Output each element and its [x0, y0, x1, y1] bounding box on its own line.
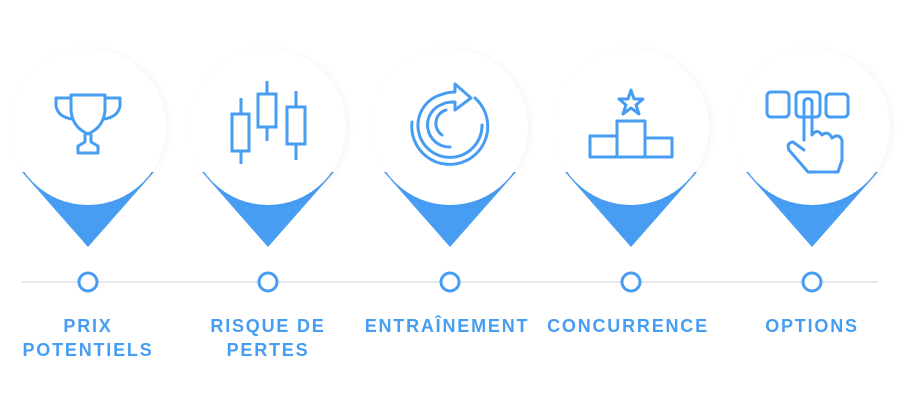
- icon: refresh: [412, 84, 488, 164]
- pin 2: [190, 49, 346, 247]
- label 1: POTENTIELS: [22, 340, 154, 360]
- label 2: PERTES: [227, 340, 309, 360]
- label 2: RISQUE DE: [210, 316, 326, 336]
- pin 5: [734, 49, 890, 247]
- icon: candles: [232, 81, 305, 164]
- timeline markers: [79, 273, 821, 291]
- icon: hand pressing: [767, 92, 848, 172]
- pin 4: [553, 49, 709, 247]
- label 1: PRIX: [63, 316, 113, 336]
- icon: trophy: [56, 95, 120, 153]
- label 3: ENTRAÎNEMENT: [365, 316, 529, 336]
- label 1: [22, 316, 154, 360]
- label 4: CONCURRENCE: [547, 316, 709, 336]
- label 2: [210, 316, 326, 360]
- pin 1: [10, 49, 166, 247]
- label 5: OPTIONS: [765, 316, 859, 336]
- icon: podium: [590, 90, 672, 157]
- pin 3: [372, 49, 528, 247]
